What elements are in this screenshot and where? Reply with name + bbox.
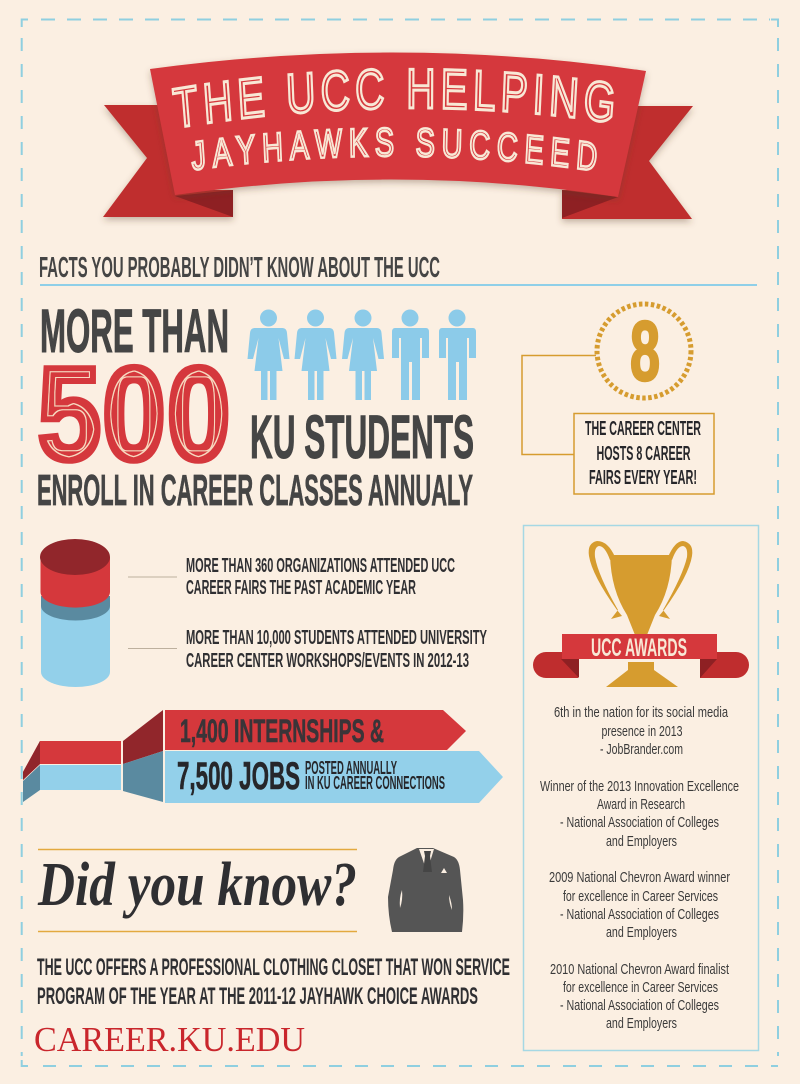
award: social media: - JobBrander.com (600, 741, 683, 758)
callout text (585, 418, 701, 489)
banner left tail (103, 105, 233, 217)
jobs note (305, 758, 445, 793)
connector line (522, 356, 596, 454)
icon: female student (342, 310, 384, 400)
fact: students: MORE THAN 10,000 STUDENTS ATTENDED UNIVERSITY (186, 627, 487, 649)
title line one: THE UCC HELPING (172, 68, 614, 128)
callout text: HOSTS 8 CAREER (596, 443, 691, 465)
icon: female student (248, 310, 290, 400)
award: 2009 chevron winner: and Employers (606, 924, 677, 941)
website url: CAREER.KU.EDU (34, 1020, 305, 1059)
icon: stacked cylinder (40, 539, 110, 687)
award: innovation excellence: and Employers (606, 833, 677, 850)
banner main ribbon (150, 52, 646, 197)
award: 2009 chevron winner: 2009 National Chevron Award winner (549, 869, 730, 886)
fact: organizations (128, 555, 455, 599)
banner right tail (562, 106, 693, 219)
jobs label: 7,500 JOBS (177, 755, 300, 798)
statistic: more than 500 KU students (37, 297, 476, 515)
award: 2010 chevron finalist: - National Association of Colleges (560, 997, 719, 1014)
panel: UCC awards (524, 526, 758, 1050)
award: innovation excellence (540, 778, 739, 850)
award: innovation excellence: - National Association of Colleges (560, 814, 719, 831)
callout: career fairs (522, 304, 714, 494)
red ribbon tail (23, 741, 121, 780)
award: 2009 chevron winner: for excellence in Career Services (563, 888, 718, 905)
award: social media (554, 704, 728, 758)
clothing closet text (37, 954, 510, 1010)
internships label: 1,400 INTERNSHIPS & (180, 713, 384, 749)
title banner (102, 52, 694, 226)
blue ribbon tail (40, 765, 121, 790)
icon: male student (439, 310, 476, 400)
fact: organizations: MORE THAN 360 ORGANIZATIONS ATTENDED UCC (186, 555, 455, 577)
fact: students (128, 627, 487, 672)
icon: students row (248, 310, 476, 400)
award: 2010 chevron finalist (550, 961, 730, 1032)
fact: students: CAREER CENTER WORKSHOPS/EVENTS IN 2012-13 (186, 650, 469, 672)
awards ribbon: UCC AWARDS (591, 634, 687, 662)
red arrow (165, 710, 466, 750)
jobs note: IN KU CAREER CONNECTIONS (305, 773, 445, 793)
ribbon connector (123, 710, 163, 764)
title line two: JAYHAWKS SUCCEED (191, 126, 597, 171)
award: 2009 chevron winner (549, 869, 730, 941)
icon: male student (392, 310, 429, 400)
more than text: MORE THAN (40, 297, 229, 365)
blue arrow (165, 751, 503, 803)
banner folds (175, 190, 618, 218)
big number 500: 500 (37, 340, 231, 489)
award: 2010 chevron finalist: 2010 National Chevron Award finalist (550, 961, 730, 978)
dotted circle (597, 304, 691, 398)
icon: suit jacket (388, 848, 463, 932)
icon: female student (294, 310, 336, 400)
award: 2009 chevron winner: - National Association of Colleges (560, 906, 719, 923)
did you know heading: Did you know? (37, 851, 357, 919)
callout box (574, 414, 714, 494)
icon: trophy (589, 541, 692, 687)
award: 2010 chevron finalist: and Employers (606, 1015, 677, 1032)
award: social media: presence in 2013 (602, 723, 682, 740)
KU students text: KU STUDENTS (250, 403, 474, 471)
fact: organizations: CAREER FAIRS THE PAST ACADEMIC YEAR (186, 577, 416, 599)
callout text: THE CAREER CENTER (585, 418, 701, 440)
award: social media: 6th in the nation for its social media (554, 704, 728, 721)
awards ribbon (533, 634, 749, 678)
number 8: 8 (630, 304, 660, 398)
jobs note: POSTED ANNUALLY (305, 758, 397, 778)
award: 2010 chevron finalist: for excellence in Career Services (563, 979, 718, 996)
arrow chart: internships and jobs (23, 710, 503, 803)
award: innovation excellence: Award in Research (597, 796, 685, 813)
callout text: FAIRS EVERY YEAR! (589, 467, 697, 489)
